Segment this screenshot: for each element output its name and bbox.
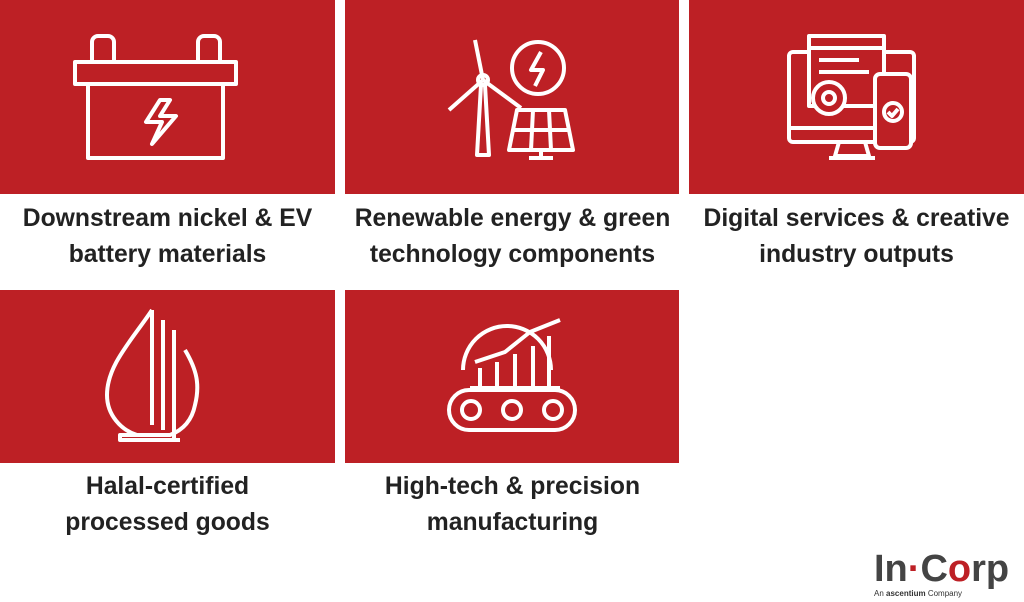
panel: digital — [689, 0, 1024, 194]
panel: manufacturing — [345, 290, 679, 463]
label: digital: industry outputs — [759, 241, 954, 268]
label: manufacturing — [385, 473, 640, 536]
label: halal — [65, 473, 270, 536]
label: halal: Halal-certified — [86, 473, 249, 500]
label: digital: Digital services & creative — [703, 205, 1010, 232]
icon: conveyor with gear — [447, 318, 577, 432]
label: renewable — [355, 205, 670, 268]
label: halal: processed goods — [65, 509, 270, 536]
label: renewable: Renewable energy & green — [355, 205, 670, 232]
label: manufacturing: manufacturing — [427, 509, 598, 536]
panel: renewable — [345, 0, 679, 194]
icon: halal symbol — [105, 308, 200, 442]
logo: An ascentium Company — [874, 589, 962, 598]
label: battery: battery materials — [69, 241, 266, 268]
logo: In·Corp — [874, 548, 1009, 590]
label: digital — [703, 205, 1010, 268]
panel: halal — [0, 290, 335, 463]
icon: battery — [73, 34, 238, 160]
label: battery — [23, 205, 312, 268]
icon: wind turbine and solar — [448, 40, 575, 160]
icon: computer and phone — [787, 34, 916, 160]
panel: battery — [0, 0, 335, 194]
label: battery: Downstream nickel & EV — [23, 205, 312, 232]
label: renewable: technology components — [370, 241, 655, 268]
label: manufacturing: High-tech & precision — [385, 473, 640, 500]
